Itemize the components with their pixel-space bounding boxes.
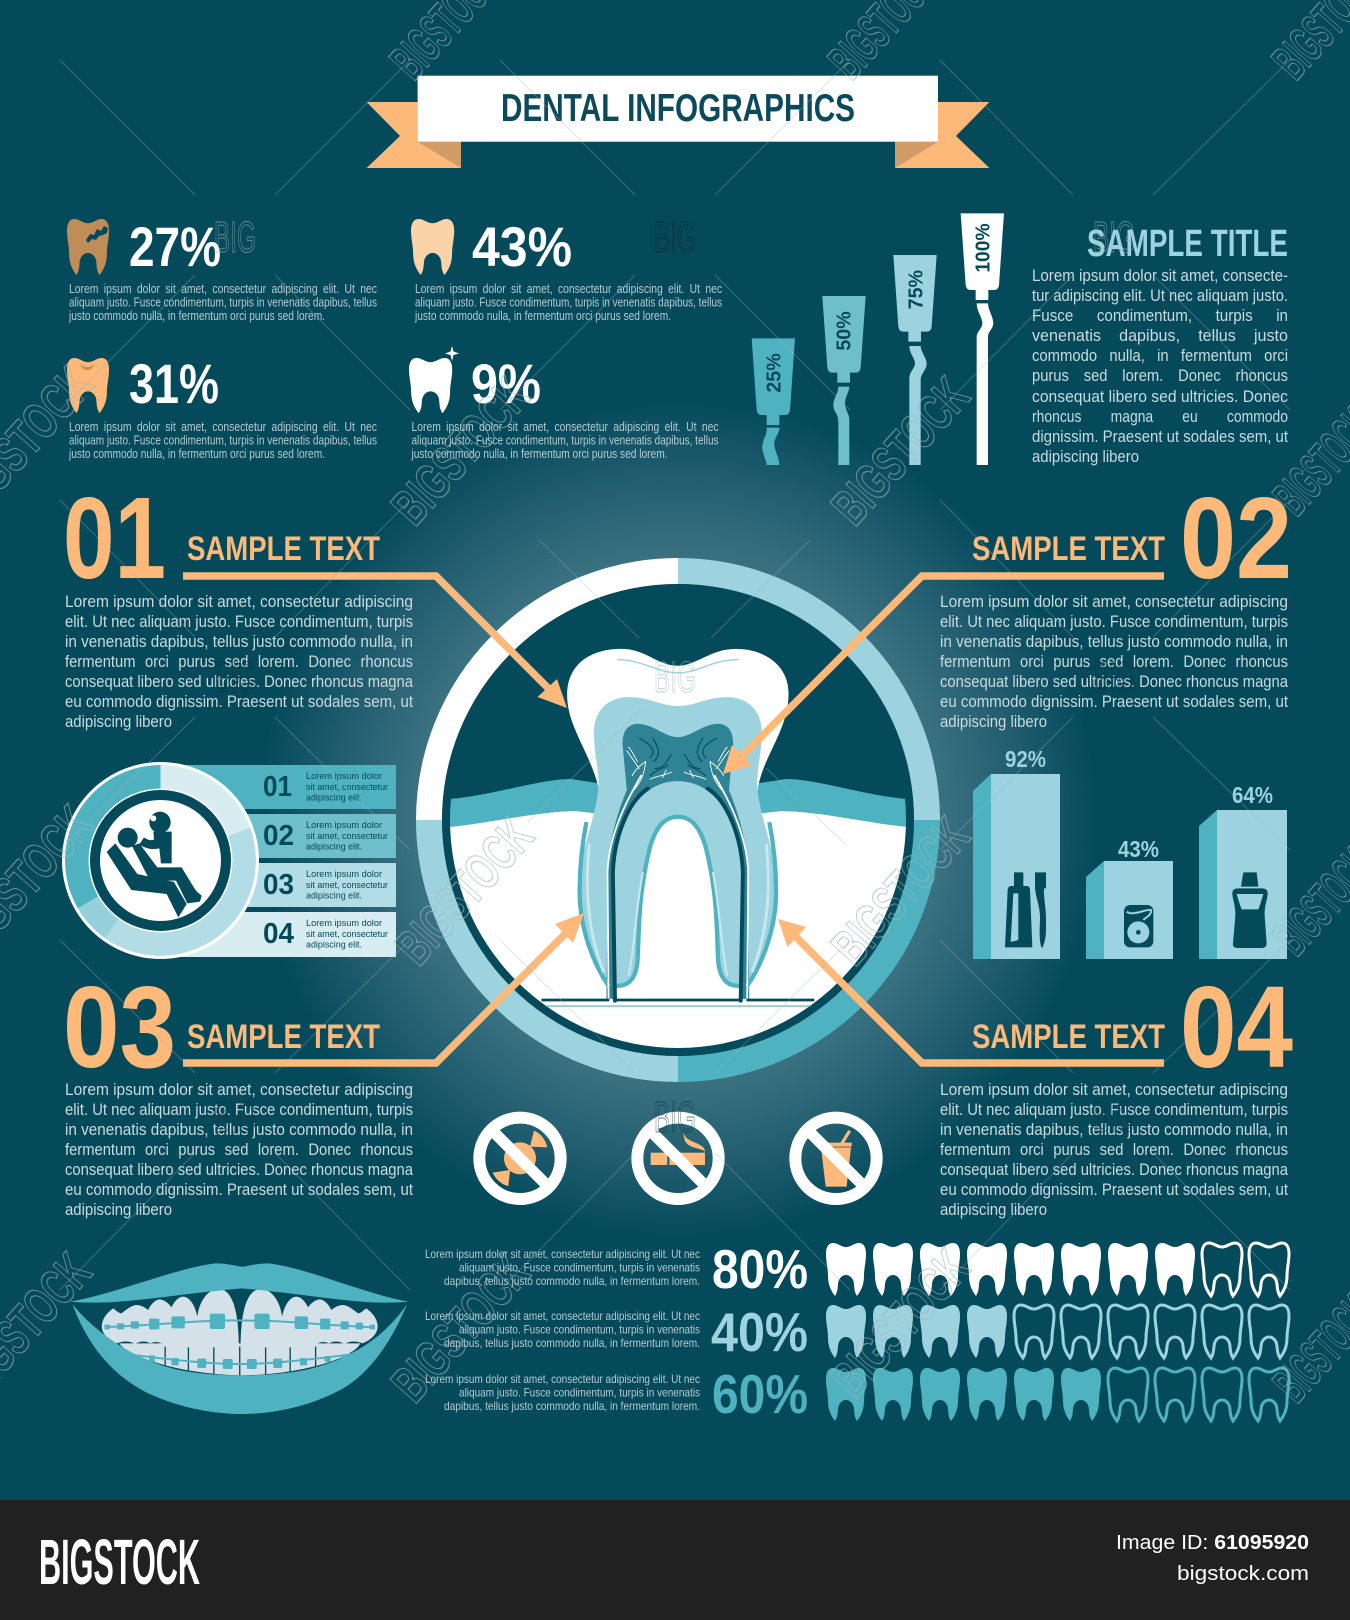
caption 40%: dapibus, tellus justo commodo nulla, in fermentum lorem. bbox=[444, 1336, 700, 1350]
caption 60%: aliquam justo. Fusce condimentum, turpis in venenatis bbox=[459, 1386, 700, 1400]
watermarks: BIGSTOCK bbox=[381, 1244, 541, 1413]
heading: SAMPLE TEXT bbox=[972, 1018, 1165, 1056]
site: bigstock.com bbox=[1177, 1563, 1309, 1585]
paragraph: consequat libero sed ultricies. Donec bbox=[1032, 388, 1288, 406]
paragraph: tur adipiscing elit. Ut nec aliquam justo. bbox=[1032, 287, 1288, 305]
watermarks: BIG bbox=[1093, 653, 1135, 702]
row 04: adipiscing elit. bbox=[306, 940, 362, 950]
watermarks: BIG bbox=[654, 653, 696, 702]
prohibition icons bbox=[479, 1118, 877, 1199]
row 01 bbox=[263, 771, 388, 804]
paragraph: Lorem ipsum dolor sit amet, consecte- bbox=[1032, 267, 1288, 285]
arch interior and bone below root bbox=[615, 817, 740, 1004]
caption 80%: aliquam justo. Fusce condimentum, turpis in venenatis bbox=[459, 1260, 700, 1274]
row 04 bbox=[263, 918, 388, 950]
row 60%: 60% bbox=[712, 1363, 808, 1425]
paragraph: Lorem ipsum dolor sit amet, consectetur adipiscing bbox=[65, 1081, 413, 1099]
row 02: Lorem ipsum dolor bbox=[306, 820, 382, 831]
caption 80% bbox=[425, 1247, 700, 1288]
paragraph: eu commodo dignissim. Praesent ut sodales sem, ut bbox=[65, 693, 413, 711]
dentist panel bbox=[62, 762, 396, 959]
paragraph: adipiscing libero bbox=[940, 713, 1047, 731]
sample title block bbox=[1032, 223, 1288, 466]
paragraph: adipiscing libero bbox=[1032, 448, 1139, 466]
caption 60%: Lorem ipsum dolor sit amet, consectetur adipiscing elit. Ut nec bbox=[425, 1372, 700, 1386]
donut chart bbox=[62, 762, 259, 959]
icon: no smoking bbox=[637, 1118, 719, 1199]
value: 31% bbox=[129, 352, 219, 415]
row 02: sit amet, consectetur bbox=[306, 831, 388, 842]
watermarks: BIGSTOCK bbox=[385, 807, 545, 976]
paragraph: consequat libero sed ultricies. Donec rhoncus magna bbox=[65, 673, 414, 691]
bone and gum bbox=[440, 779, 920, 1060]
callout arrow 01 bbox=[183, 576, 567, 708]
row 40%: 40% bbox=[711, 1301, 808, 1363]
icon: sparkling tooth bbox=[409, 346, 459, 413]
braces wires and brackets bbox=[104, 1314, 375, 1369]
paragraph: adipiscing libero bbox=[940, 1201, 1047, 1219]
watermarks: BIGSTOCK bbox=[821, 367, 981, 536]
caption 40% bbox=[425, 1309, 700, 1350]
watermarks: BIGSTOCK bbox=[821, 1239, 981, 1408]
bar: mouthwash 64%: 64% bbox=[1232, 782, 1273, 808]
paragraph: Fusce condimentum, turpis in bbox=[1032, 307, 1288, 325]
bar: floss 43% bbox=[1086, 836, 1173, 959]
title banner bbox=[367, 76, 989, 168]
row 03: Lorem ipsum dolor bbox=[306, 869, 382, 880]
bar: mouthwash 64% bbox=[1199, 782, 1287, 959]
caption 80%: Lorem ipsum dolor sit amet, consectetur adipiscing elit. Ut nec bbox=[425, 1247, 700, 1261]
caption 80%: dapibus, tellus justo commodo nulla, in fermentum lorem. bbox=[444, 1274, 700, 1288]
bottom captions bbox=[425, 1247, 700, 1413]
bar: toothpaste 92% bbox=[973, 746, 1060, 959]
stat: 31% bbox=[67, 352, 377, 461]
paragraph: in venenatis dapibus, tellus justo commodo nulla, in bbox=[940, 633, 1288, 651]
description bbox=[68, 282, 377, 323]
row 01: Lorem ipsum dolor bbox=[306, 771, 382, 782]
row 02: 02 bbox=[263, 820, 294, 852]
description: Lorem ipsum dolor sit amet, consectetur adipiscing elit. Ut nec bbox=[412, 420, 718, 434]
paragraph: purus sed lorem. Donec rhoncus bbox=[1032, 367, 1288, 385]
row 40% bbox=[711, 1301, 1289, 1363]
row 80% bbox=[712, 1238, 1289, 1300]
upper teeth bbox=[102, 1289, 378, 1347]
callout arrow 02 bbox=[723, 576, 1164, 774]
callout arrow 04 bbox=[778, 919, 1164, 1063]
description: aliquam justo. Fusce condimentum, turpis in venenatis dapibus, tellus bbox=[412, 434, 718, 448]
value: 43% bbox=[472, 215, 572, 278]
row 60% bbox=[712, 1363, 1289, 1425]
bar: floss 43%: 43% bbox=[1118, 836, 1159, 862]
watermarks: BIG bbox=[1093, 213, 1135, 262]
description: Lorem ipsum dolor sit amet, consectetur adipiscing elit. Ut nec bbox=[415, 282, 722, 296]
watermarks: BIG bbox=[654, 213, 696, 262]
paragraph: consequat libero sed ultricies. Donec rhoncus magna bbox=[940, 673, 1289, 691]
title: DENTAL INFOGRAPHICS bbox=[501, 87, 855, 130]
paragraph: eu commodo dignissim. Praesent ut sodales sem, ut bbox=[940, 693, 1288, 711]
value: 27% bbox=[129, 215, 221, 278]
paragraph: dignissim. Praesent ut sodales sem, ut bbox=[1032, 428, 1288, 446]
paragraph: in venenatis dapibus, tellus justo commodo nulla, in bbox=[65, 1121, 413, 1139]
heading: SAMPLE TEXT bbox=[187, 1018, 380, 1056]
callout arrow 03 bbox=[183, 913, 584, 1063]
icons: toothpaste, brush, floss, mouthwash bbox=[1005, 872, 1268, 948]
row 02: adipiscing elit. bbox=[306, 842, 362, 852]
image id: Image ID: 61095920 bbox=[1116, 1532, 1309, 1554]
row 03: 03 bbox=[263, 869, 294, 901]
ribbon right bbox=[895, 102, 989, 168]
tooth cross-section bbox=[541, 649, 814, 1006]
description: justo commodo nulla, in fermentum orci purus sed lorem. bbox=[414, 309, 671, 323]
watermarks: BIGSTOCK bbox=[821, 807, 981, 976]
description: justo commodo nulla, in fermentum orci purus sed lorem. bbox=[411, 447, 668, 461]
row 03: adipiscing elit. bbox=[306, 890, 362, 902]
icon: no soda bbox=[795, 1118, 877, 1199]
paragraph: eu commodo dignissim. Praesent ut sodales sem, ut bbox=[65, 1181, 413, 1199]
root outer and inner outlines bbox=[580, 817, 776, 986]
number: 01 bbox=[63, 473, 166, 603]
enamel crown bbox=[567, 649, 789, 822]
description bbox=[411, 420, 718, 461]
description: justo commodo nulla, in fermentum orci purus sed lorem. bbox=[68, 309, 325, 323]
icon: decayed tooth bbox=[67, 219, 109, 275]
lips bbox=[70, 1263, 408, 1414]
caption 40%: aliquam justo. Fusce condimentum, turpis in venenatis bbox=[459, 1322, 700, 1336]
description: Lorem ipsum dolor sit amet, consectetur adipiscing elit. Ut nec bbox=[69, 282, 377, 296]
paragraph bbox=[940, 593, 1289, 731]
tube 50% bbox=[822, 296, 866, 465]
tube 100%: 100% bbox=[972, 223, 994, 273]
number: 02 bbox=[1180, 473, 1292, 603]
canal and nerves right bbox=[684, 738, 748, 1002]
row 80%: 80% bbox=[712, 1238, 808, 1300]
paragraph: adipiscing libero bbox=[65, 713, 172, 731]
caption 40%: Lorem ipsum dolor sit amet, consectetur adipiscing elit. Ut nec bbox=[425, 1309, 700, 1323]
number: 03 bbox=[63, 962, 176, 1092]
paragraph: elit. Ut nec aliquam justo. Fusce condimentum, turpis bbox=[940, 1101, 1288, 1119]
row 01: adipiscing elit. bbox=[306, 792, 362, 804]
watermarks: BIG bbox=[1093, 1093, 1135, 1142]
tube 100% bbox=[961, 213, 1004, 465]
paragraph bbox=[65, 593, 414, 731]
footer bar bbox=[0, 1500, 1350, 1620]
root base lines bbox=[541, 996, 814, 1004]
paragraph: commodo nulla, in fermentum orci bbox=[1032, 347, 1288, 365]
ring segments bbox=[429, 571, 927, 1069]
stat: 9% bbox=[409, 346, 718, 461]
banner plate bbox=[418, 76, 938, 142]
watermarks: BIG bbox=[654, 1093, 696, 1142]
smile with braces bbox=[70, 1263, 408, 1414]
paragraph: Lorem ipsum dolor sit amet, consectetur adipiscing bbox=[65, 593, 413, 611]
dentin arch bbox=[613, 781, 742, 986]
row 04: 04 bbox=[263, 918, 294, 950]
tube 50%: 50% bbox=[833, 311, 856, 351]
row 01: sit amet, consectetur bbox=[306, 782, 388, 793]
description: justo commodo nulla, in fermentum orci purus sed lorem. bbox=[68, 447, 325, 461]
toothpaste tube chart bbox=[752, 213, 1004, 465]
paragraph bbox=[65, 1081, 414, 1219]
icon: tooth bbox=[411, 219, 454, 275]
bar chart bbox=[973, 746, 1287, 959]
watermarks: BIG bbox=[214, 653, 256, 702]
section 04 bbox=[940, 962, 1293, 1219]
section 01 bbox=[63, 473, 414, 731]
heading: SAMPLE TEXT bbox=[972, 530, 1165, 568]
row 03: sit amet, consectetur bbox=[306, 880, 388, 891]
paragraph bbox=[940, 1081, 1289, 1219]
paragraph: in venenatis dapibus, tellus justo commodo nulla, in bbox=[65, 633, 413, 651]
tooth pictogram rows bbox=[711, 1238, 1289, 1425]
paragraph: consequat libero sed ultricies. Donec rhoncus magna bbox=[65, 1161, 414, 1179]
paragraph: adipiscing libero bbox=[65, 1201, 172, 1219]
watermarks: BIG bbox=[214, 1093, 256, 1142]
tube 25% bbox=[752, 338, 795, 465]
pulp chamber bbox=[606, 724, 749, 999]
paragraph: venenatis dapibus, tellus justo bbox=[1032, 327, 1288, 345]
tube 75% bbox=[893, 255, 937, 465]
paragraph: elit. Ut nec aliquam justo. Fusce condimentum, turpis bbox=[65, 1101, 413, 1119]
value: 9% bbox=[471, 352, 541, 415]
paragraph: in venenatis dapibus, tellus justo commodo nulla, in bbox=[940, 1121, 1288, 1139]
row 04: sit amet, consectetur bbox=[306, 929, 388, 940]
paragraph: fermentum orci purus sed lorem. Donec rhoncus bbox=[65, 653, 413, 671]
icon: worn tooth bbox=[67, 358, 109, 413]
paragraph: Lorem ipsum dolor sit amet, consectetur adipiscing bbox=[940, 1081, 1288, 1099]
stat: 43% bbox=[411, 215, 722, 323]
ribbon left bbox=[367, 102, 461, 168]
number: 04 bbox=[1180, 962, 1293, 1092]
paragraph: fermentum orci purus sed lorem. Donec rhoncus bbox=[940, 1141, 1288, 1159]
central tooth diagram bbox=[429, 571, 927, 1069]
paragraph: Lorem ipsum dolor sit amet, consectetur adipiscing bbox=[940, 593, 1288, 611]
bars bbox=[160, 765, 396, 957]
description: aliquam justo. Fusce condimentum, turpis in venenatis dapibus, tellus bbox=[69, 434, 377, 448]
icon: no sweets bbox=[479, 1118, 561, 1199]
bar: toothpaste 92%: 92% bbox=[1005, 746, 1046, 772]
stat: 27% bbox=[67, 215, 377, 323]
description: aliquam justo. Fusce condimentum, turpis in venenatis dapibus, tellus bbox=[69, 296, 377, 310]
paragraph: elit. Ut nec aliquam justo. Fusce condimentum, turpis bbox=[940, 613, 1288, 631]
paragraph: rhoncus magna eu commodo bbox=[1032, 408, 1288, 426]
lower teeth bbox=[119, 1343, 360, 1375]
paragraph: consequat libero sed ultricies. Donec rhoncus magna bbox=[940, 1161, 1289, 1179]
description bbox=[414, 282, 722, 323]
paragraph: fermentum orci purus sed lorem. Donec rhoncus bbox=[65, 1141, 413, 1159]
description: Lorem ipsum dolor sit amet, consectetur adipiscing elit. Ut nec bbox=[69, 420, 377, 434]
icon: dentist and patient bbox=[107, 812, 202, 917]
row 01: 01 bbox=[263, 771, 292, 803]
paragraph: fermentum orci purus sed lorem. Donec rhoncus bbox=[940, 653, 1288, 671]
tube 25%: 25% bbox=[763, 353, 786, 393]
row 04: Lorem ipsum dolor bbox=[306, 918, 382, 929]
heading: SAMPLE TEXT bbox=[187, 530, 380, 568]
watermarks: BIG bbox=[214, 213, 256, 262]
description: aliquam justo. Fusce condimentum, turpis in venenatis dapibus, tellus bbox=[415, 296, 722, 310]
paragraph: elit. Ut nec aliquam justo. Fusce condimentum, turpis bbox=[65, 613, 413, 631]
watermarks: BIGSTOCK bbox=[381, 367, 541, 536]
description bbox=[68, 420, 377, 461]
paragraph bbox=[1032, 267, 1288, 466]
paragraph: eu commodo dignissim. Praesent ut sodales sem, ut bbox=[940, 1181, 1288, 1199]
caption 60%: dapibus, tellus justo commodo nulla, in fermentum lorem. bbox=[444, 1399, 700, 1413]
row 03 bbox=[263, 869, 388, 902]
canal and nerves left bbox=[607, 738, 671, 1002]
caption 60% bbox=[425, 1372, 700, 1413]
tube 75%: 75% bbox=[904, 270, 927, 309]
section 03 bbox=[63, 962, 414, 1219]
dentin and roots bbox=[579, 697, 777, 986]
footer bar: BIGSTOCK bbox=[39, 1526, 200, 1598]
section 02 bbox=[940, 473, 1292, 731]
row 02 bbox=[263, 820, 388, 852]
